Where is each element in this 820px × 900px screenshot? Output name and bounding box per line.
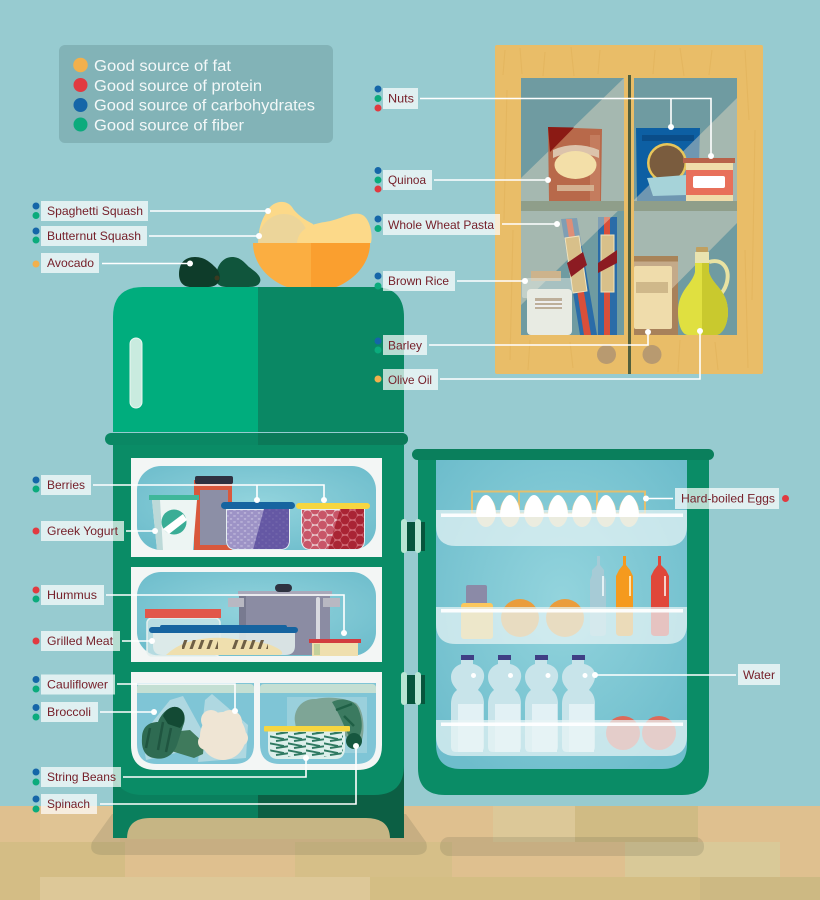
label: Olive Oil: [374, 328, 703, 390]
plastic bags: [142, 696, 210, 760]
shelf 1: dairy and berries: [131, 458, 382, 557]
label: Olive Oil: Olive Oil: [388, 373, 432, 387]
egg carton: [472, 491, 645, 527]
label: Cauliflower: [32, 674, 238, 714]
legend: carbohydrates: Good source of carbohydrates: [94, 98, 315, 114]
jar: [194, 476, 233, 550]
hummus tub: [309, 639, 361, 656]
label: Cauliflower: Cauliflower: [47, 678, 108, 692]
left crisper: [137, 683, 254, 764]
label: Avocado: Avocado: [47, 256, 94, 270]
legend: [59, 45, 333, 143]
cabinet door divider: [628, 75, 631, 374]
spinach: [295, 698, 364, 749]
string beans container: [264, 726, 350, 759]
label: Water: Water: [743, 668, 775, 682]
label: Butternut Squash: [32, 226, 262, 246]
label: Berries: Berries: [47, 478, 85, 492]
floor shadows: [91, 814, 704, 856]
legend: fiber: Good source of fiber: [94, 118, 245, 134]
greek yogurt cup: [149, 495, 199, 550]
label: Hard-boiled Eggs: Hard-boiled Eggs: [681, 492, 775, 506]
red lid container: [145, 609, 221, 656]
label: Avocado: [32, 253, 193, 273]
label: Broccoli: [32, 702, 157, 722]
shelves: [521, 201, 624, 211]
pasta wrappers: [565, 235, 617, 293]
glass reflection bands: [521, 78, 737, 327]
legend: fat: Good source of fat: [94, 58, 232, 75]
nuts window and band: [647, 143, 687, 196]
tin of nuts: [683, 158, 735, 201]
bag of quinoa: [548, 127, 602, 201]
avocados: [179, 257, 260, 287]
label: Broccoli: Broccoli: [47, 705, 91, 719]
grilled meat container: [149, 625, 298, 655]
olive oil bottle: [678, 247, 728, 335]
cauliflower: [198, 710, 248, 760]
door shelves: [436, 510, 687, 756]
barley box: [634, 256, 678, 329]
freezer handle: [130, 338, 142, 408]
jar, oranges and sauce bottles: [461, 556, 669, 639]
right crisper: [260, 683, 376, 764]
brown rice jar: [522, 271, 572, 335]
water bottles: [451, 655, 595, 752]
label: Spinach: [32, 743, 359, 814]
shelf rails: [441, 514, 683, 726]
bowl of squash: [253, 202, 372, 287]
label: String Beans: [32, 755, 309, 787]
eggs: [476, 495, 639, 517]
open fridge door: [412, 449, 714, 795]
label: Quinoa: [374, 167, 551, 192]
label: Brown Rice: [374, 271, 528, 291]
tomatoes: [606, 716, 676, 750]
cabinet back panes: [521, 78, 624, 335]
label: Greek Yogurt: [32, 521, 158, 541]
legend: protein: Good source of protein: [94, 78, 262, 95]
label: Spaghetti Squash: [32, 201, 271, 221]
fridge base: [113, 445, 404, 839]
label: Hummus: Hummus: [47, 588, 97, 602]
label: Barley: [374, 329, 651, 355]
bag of nuts base: [636, 128, 700, 201]
raspberries container: [296, 503, 370, 550]
label: Grilled Meat: Grilled Meat: [47, 634, 114, 648]
label: Quinoa: Quinoa: [388, 173, 426, 187]
freezer divider bar: [105, 433, 408, 445]
label: Barley: Barley: [388, 338, 422, 352]
label: Hummus: [32, 585, 347, 636]
label: Grilled Meat: [32, 631, 155, 651]
floor: [0, 806, 820, 900]
whole wheat pasta boxes: [561, 217, 617, 335]
kitchen cabinet: [495, 45, 763, 374]
jar of barley base: [634, 256, 678, 335]
label: Whole Wheat Pasta: Whole Wheat Pasta: [388, 218, 494, 232]
cooking pot: [228, 584, 340, 655]
label: String Beans: String Beans: [47, 770, 116, 784]
label: Whole Wheat Pasta: [374, 214, 560, 235]
blueberries container: [221, 502, 295, 550]
broccoli: [142, 707, 204, 759]
door hinges: [401, 519, 425, 705]
label: Nuts: [374, 86, 714, 159]
label: Hard-boiled Eggs: [643, 488, 789, 509]
label: Spaghetti Squash: Spaghetti Squash: [47, 204, 143, 218]
label: Berries: [32, 475, 327, 503]
freezer compartment: [113, 287, 404, 432]
label: Butternut Squash: Butternut Squash: [47, 229, 141, 243]
label: Brown Rice: Brown Rice: [388, 274, 449, 288]
label: Nuts: Nuts: [388, 92, 414, 106]
label: Greek Yogurt: Greek Yogurt: [47, 524, 119, 538]
label: Spinach: Spinach: [47, 797, 90, 811]
label: Water: [592, 664, 780, 685]
shelf 2: pot and containers: [131, 567, 382, 662]
shelf 3: vegetable crispers: [131, 672, 382, 770]
cabinet knobs: [597, 345, 662, 364]
